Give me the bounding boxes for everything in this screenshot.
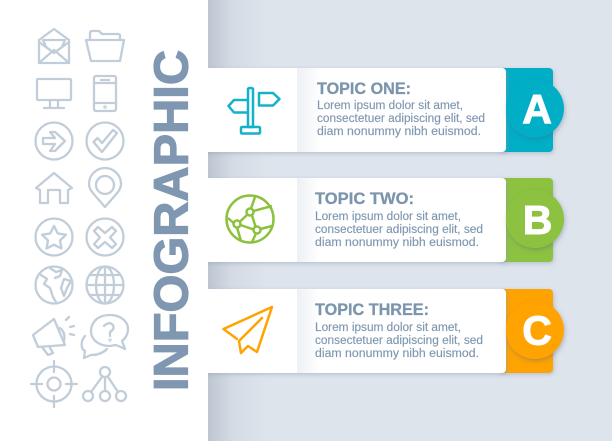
icon: cross circle bbox=[86, 218, 124, 256]
icon: globe bbox=[86, 266, 124, 304]
left white panel bbox=[0, 0, 208, 441]
panel: topic two bbox=[200, 178, 564, 262]
panel: topic three bbox=[200, 289, 564, 373]
card body bbox=[200, 289, 506, 373]
text block: diam nonummy nibh euismod. bbox=[317, 126, 481, 138]
icon: monitor bbox=[37, 79, 71, 108]
icon: star circle bbox=[36, 218, 72, 256]
text block: consectetuer adipiscing elit, sed bbox=[315, 335, 483, 347]
tab: B bbox=[498, 178, 553, 262]
icon: map pin bbox=[89, 168, 121, 207]
text block bbox=[315, 322, 483, 360]
icon: arrow circle bbox=[36, 122, 72, 160]
icon: network globe bbox=[226, 196, 274, 242]
icon: megaphone bbox=[33, 317, 74, 355]
tab: C bbox=[498, 289, 553, 373]
background bbox=[208, 0, 612, 441]
text block bbox=[317, 100, 485, 138]
icon: house bbox=[36, 173, 72, 203]
icon: folder bbox=[86, 31, 124, 61]
badge B bbox=[506, 190, 564, 248]
text block bbox=[315, 211, 483, 249]
icon: target bbox=[31, 361, 77, 407]
badge C: C bbox=[522, 308, 552, 354]
heading: TOPIC ONE: bbox=[317, 79, 411, 98]
badge A bbox=[506, 80, 564, 138]
badge A: A bbox=[522, 86, 552, 132]
text block: Lorem ipsum dolor sit amet, bbox=[315, 211, 461, 223]
badge B: B bbox=[523, 197, 552, 243]
heading: TOPIC THREE: bbox=[315, 300, 429, 319]
heading: TOPIC TWO: bbox=[315, 189, 414, 208]
icon: envelope bbox=[39, 29, 69, 63]
badge C bbox=[506, 301, 564, 359]
text block: diam nonummy nibh euismod. bbox=[315, 348, 479, 360]
icon: phone bbox=[94, 76, 116, 111]
icon: paper plane bbox=[224, 307, 272, 353]
card body bbox=[200, 68, 506, 152]
title: vertical heading: INFOGRAPHIC bbox=[144, 50, 198, 391]
icon: check circle bbox=[86, 122, 124, 160]
panel: icon column bbox=[31, 29, 128, 407]
text block: consectetuer adipiscing elit, sed bbox=[315, 224, 483, 236]
text block: consectetuer adipiscing elit, sed bbox=[317, 113, 485, 125]
tab: A bbox=[498, 68, 553, 152]
text block: Lorem ipsum dolor sit amet, bbox=[317, 100, 463, 112]
icon: earth bbox=[36, 266, 72, 304]
text block: diam nonummy nibh euismod. bbox=[315, 237, 479, 249]
icon: question bubbles bbox=[82, 315, 128, 358]
panel: topic one bbox=[200, 68, 564, 152]
card body bbox=[200, 178, 506, 262]
icon: network bbox=[83, 367, 126, 401]
icon: signpost bbox=[228, 88, 280, 134]
text block: Lorem ipsum dolor sit amet, bbox=[315, 322, 461, 334]
